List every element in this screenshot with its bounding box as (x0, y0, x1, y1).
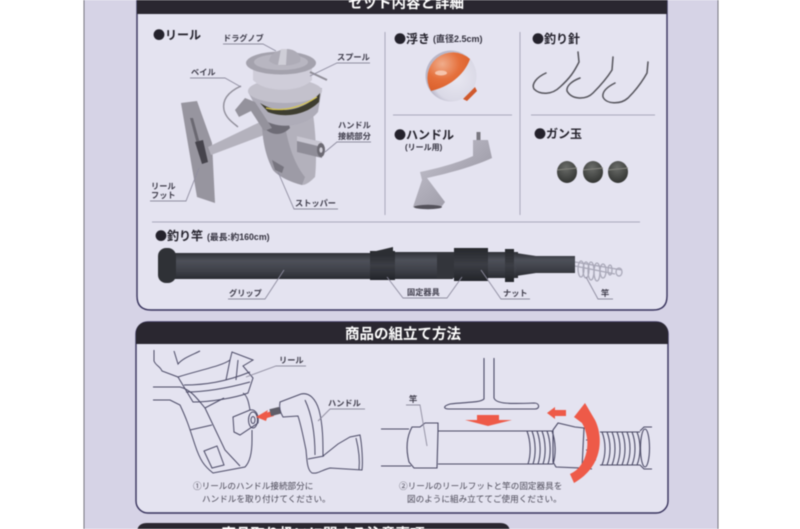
label: handle connection (325, 119, 372, 152)
rod tip (575, 261, 622, 281)
header bar: set contents (137, 0, 667, 14)
label: stopper (278, 172, 338, 209)
reel label: リール (279, 354, 304, 366)
label: handle connection: 接続部分 (338, 130, 372, 142)
handle label: ハンドル (328, 397, 361, 409)
label: reel foot (150, 168, 199, 201)
thread coils (527, 431, 640, 465)
heading: float: ●浮き (394, 30, 430, 47)
label: reel foot: フット (151, 189, 176, 201)
heading: fishing rod (155, 227, 270, 244)
icon: hooks (533, 52, 648, 103)
reel foot drawing (445, 358, 539, 409)
caption: step 1 (193, 480, 331, 504)
butt cap (158, 248, 176, 283)
caption: step 1: ①リールのハンドル接続部分に (193, 480, 313, 491)
label band (260, 93, 320, 115)
red arrow: rotate (570, 403, 600, 483)
spool (253, 64, 312, 90)
caption: step 2: 図のように組み立ててご使用ください。 (407, 493, 562, 504)
grip (170, 253, 373, 279)
label: reel foot: リール (151, 180, 176, 192)
label: nut: ナット (503, 287, 528, 299)
fixing collar (454, 248, 488, 281)
heading: float: (直径2.5cm) (433, 33, 483, 44)
icon: handle (413, 132, 492, 209)
reel photo (181, 49, 327, 203)
label: drag knob: ドラグノブ (223, 32, 265, 44)
taper (516, 253, 575, 276)
heading: hooks: ●釣り針 (532, 30, 580, 47)
label: rod (586, 277, 613, 299)
label: spool: スプール (337, 51, 370, 63)
panel: handling notes header (137, 523, 510, 529)
heading: handle: (リール用) (405, 143, 443, 152)
label: bail: ベイル (191, 66, 216, 78)
bail arm (235, 98, 272, 131)
reel foot (181, 101, 215, 203)
heading: fishing rod: (最長:約160cm) (207, 231, 270, 242)
heading: assembly: 商品の組立て方法 (345, 325, 461, 343)
label: drag knob (223, 32, 276, 51)
label: rod: 竿 (601, 287, 609, 299)
handle label (318, 397, 365, 421)
heading: fishing rod: ●釣り竿 (155, 227, 203, 244)
rod label: 竿 (409, 393, 417, 405)
caption: step 1: ハンドルを取り付けてください。 (202, 494, 331, 504)
label: fixing fitting (387, 277, 462, 298)
heading: split shot: ●ガン玉 (534, 125, 582, 142)
handle line drawing (269, 394, 362, 473)
reel body (262, 108, 316, 185)
red arrow: insert handle (256, 410, 274, 421)
panel: set contents (137, 0, 667, 310)
label: fixing fitting: 固定器具 (407, 286, 440, 298)
heading: handle (394, 126, 454, 152)
red arrow: down (465, 415, 512, 426)
panel: assembly (136, 322, 668, 513)
spool rim (246, 52, 316, 74)
reel arm (208, 122, 272, 155)
label: handle connection: ハンドル (338, 119, 371, 131)
reel line drawing (153, 350, 258, 473)
icon: split shot (557, 161, 628, 183)
label: stopper: ストッパー (295, 197, 336, 209)
reel label (246, 354, 306, 377)
heading: reel: ●リール (153, 26, 201, 43)
package face (84, 0, 718, 529)
label: grip (228, 270, 284, 299)
handle connector (297, 136, 322, 158)
fishing rod photo (158, 247, 622, 283)
header bar: assembly (136, 322, 668, 344)
red arrow: left (547, 407, 566, 419)
label: spool (310, 51, 370, 76)
label: bail (190, 66, 241, 87)
thread (437, 252, 454, 278)
rod line drawing (381, 423, 652, 469)
icon: float (426, 50, 477, 102)
rotor (248, 88, 322, 126)
rod label (406, 393, 427, 446)
label: grip: グリップ (229, 287, 263, 299)
label: nut (481, 270, 530, 299)
caption: step 2: ②リールのリールフットと竿の固定器具を (399, 480, 562, 491)
drag knob (269, 49, 300, 66)
caption: step 2 (399, 480, 562, 504)
bail wire (224, 86, 241, 127)
heading: float (394, 30, 483, 47)
heading: handle: ●ハンドル (394, 126, 454, 143)
